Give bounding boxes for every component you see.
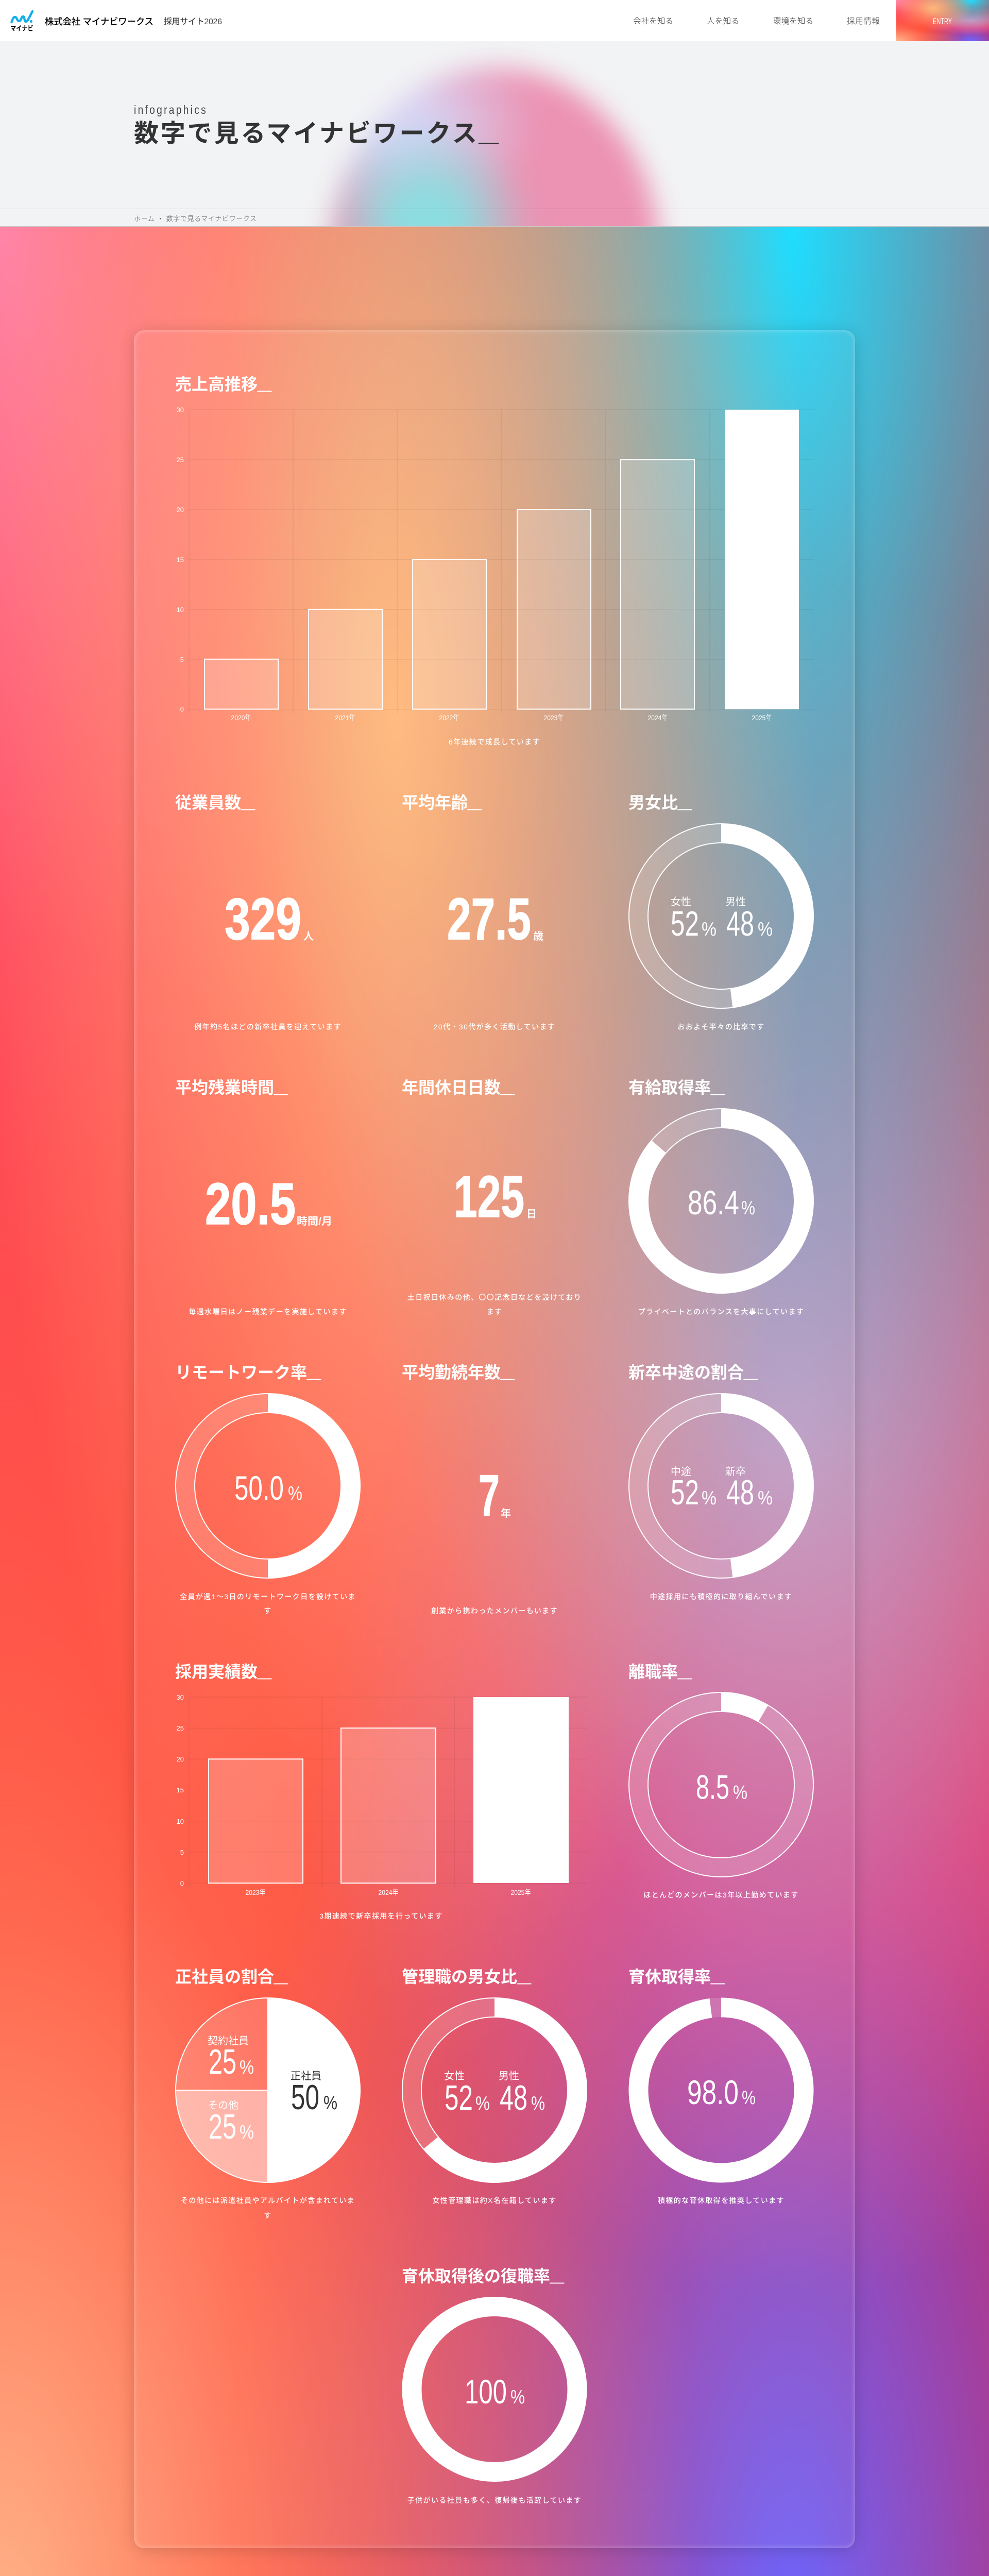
caption: プライベートとのバランスを大事にしています <box>638 1308 804 1316</box>
bar chart: sales: 2024年 <box>648 714 668 722</box>
heading: 平均残業時間__ <box>175 1078 288 1097</box>
bar chart: sales: 2023年 <box>544 714 564 722</box>
panel: employees <box>175 793 342 1031</box>
donut labels: 新卒 <box>725 1466 746 1478</box>
pie labels: % <box>240 2057 254 2078</box>
donut labels: 52 <box>671 1473 699 1512</box>
pie labels: その他 <box>208 2099 238 2111</box>
panel: overtime <box>175 1078 347 1316</box>
donut labels: 男性 <box>725 896 746 908</box>
bar chart: hires: 20 <box>177 1755 184 1763</box>
donut chart <box>402 1998 587 2182</box>
heading: 育休取得率__ <box>628 1968 725 1986</box>
donut labels: 女性 <box>671 896 691 908</box>
heading: 採用実績数__ <box>175 1663 271 1681</box>
panel: turnover <box>628 1663 813 1899</box>
bar chart: sales: 30 <box>177 406 184 414</box>
heading: 離職率__ <box>628 1663 692 1681</box>
stat: 7 <box>479 1463 500 1529</box>
heading: 平均年齢__ <box>402 793 482 812</box>
breadcrumb: ホーム ・ 数字で見るマイナビワークス <box>134 215 257 223</box>
donut labels: 48 <box>500 2078 527 2117</box>
stat: 日 <box>526 1209 537 1220</box>
donut value: % <box>742 2087 756 2109</box>
bar chart: sales: 2020年 <box>231 714 251 722</box>
heading: 有給取得率__ <box>628 1078 725 1097</box>
donut labels <box>671 896 773 943</box>
donut value: % <box>510 2386 525 2408</box>
donut value: 86.4 <box>688 1183 739 1222</box>
caption: ます <box>487 1308 502 1316</box>
donut labels: % <box>475 2093 490 2114</box>
heading: 男女比__ <box>628 793 692 812</box>
caption: 6年連続で成長しています <box>449 738 540 746</box>
donut value: 8.5 <box>696 1768 729 1806</box>
bar chart: hires: 0 <box>180 1879 184 1887</box>
panel: annual holidays <box>402 1078 582 1316</box>
heading: 従業員数__ <box>175 793 255 812</box>
bar chart: sales <box>177 406 814 722</box>
donut chart <box>412 2307 577 2472</box>
donut value: 100 <box>465 2372 507 2411</box>
panel: paid leave rate <box>628 1078 813 1316</box>
caption: 毎週水曜日はノー残業デーを実施しています <box>189 1308 347 1316</box>
bar chart: hires <box>177 1693 587 1896</box>
bar chart: hires: 2023年 <box>245 1888 266 1896</box>
bar chart: hires: 2024年 <box>378 1888 399 1896</box>
donut chart <box>629 1394 813 1578</box>
caption: す <box>264 1606 272 1615</box>
donut labels: 52 <box>445 2078 473 2117</box>
bar chart: sales: 2025年 <box>752 714 772 722</box>
stat: 27.5 <box>447 887 531 952</box>
hero title: 数字で見るマイナビワークス__ <box>134 120 499 147</box>
pie labels: 50 <box>291 2078 319 2117</box>
donut value: % <box>288 1483 302 1504</box>
heading: 新卒中途の割合__ <box>628 1363 758 1382</box>
donut labels: 中途 <box>671 1466 691 1478</box>
bar chart: sales: 0 <box>180 705 184 713</box>
stat: 20.5 <box>205 1172 296 1237</box>
panel: return rate <box>402 2267 582 2504</box>
entry button background <box>896 0 989 41</box>
donut value: % <box>741 1197 755 1219</box>
heading: 売上高推移__ <box>175 375 271 394</box>
bar chart: sales: 20 <box>177 506 184 514</box>
bar chart: hires: 30 <box>177 1693 184 1701</box>
panel: remote work <box>175 1363 360 1615</box>
donut labels: 52 <box>671 904 699 943</box>
panel: tenure <box>402 1363 558 1615</box>
donut chart <box>176 1394 360 1578</box>
caption: 土日祝日休みの他、〇〇記念日などを設けており <box>407 1293 582 1301</box>
donut labels: % <box>758 1487 773 1509</box>
heading: 平均勤続年数__ <box>402 1363 515 1382</box>
donut chart <box>629 1109 813 1293</box>
header logo <box>10 11 222 32</box>
heading: 育休取得後の復職率__ <box>402 2267 564 2285</box>
caption: 例年約5名ほどの新卒社員を迎えています <box>194 1023 342 1031</box>
caption: 3期連続で新卒採用を行っています <box>319 1912 443 1920</box>
pie labels: 正社員 <box>291 2070 321 2082</box>
donut labels: % <box>702 1487 717 1509</box>
panel: sales trend <box>175 375 814 746</box>
global navigation <box>633 16 880 26</box>
pie chart <box>176 1998 360 2182</box>
donut labels: 男性 <box>499 2070 519 2082</box>
panel: gender ratio <box>628 793 813 1031</box>
pie labels: % <box>323 2092 337 2114</box>
pie labels: % <box>240 2122 254 2143</box>
bar chart: sales: 25 <box>177 456 184 464</box>
donut labels: 48 <box>726 904 754 943</box>
bar chart: sales: 2022年 <box>439 714 459 722</box>
stat: 人 <box>303 931 314 942</box>
bar chart: hires: 10 <box>177 1818 184 1825</box>
hero eyebrow: infographics <box>134 103 208 116</box>
logo icon <box>11 11 32 23</box>
heading: リモートワーク率__ <box>175 1363 321 1382</box>
pie labels <box>208 2035 337 2146</box>
stat: 時間/月 <box>297 1215 332 1227</box>
hero heading <box>134 103 499 147</box>
pie labels: 25 <box>209 2042 236 2081</box>
pie labels: 契約社員 <box>208 2035 249 2047</box>
caption: 20代・30代が多く活動しています <box>434 1023 555 1031</box>
heading: 正社員の割合__ <box>175 1968 288 1986</box>
bar chart: sales: 5 <box>180 656 184 664</box>
donut labels: % <box>702 919 717 940</box>
donut chart <box>629 824 813 1008</box>
panel: average age <box>402 793 555 1031</box>
entry label: ENTRY <box>933 16 952 26</box>
caption: 女性管理職は約X名在籍しています <box>432 2196 557 2205</box>
panel: regular employees <box>175 1968 360 2219</box>
stat: 125 <box>454 1164 524 1230</box>
caption: その他には派遣社員やアルバイトが含まれていま <box>181 2196 355 2205</box>
panel: childcare leave rate <box>628 1968 804 2205</box>
site name: 採用サイト2026 <box>164 17 222 26</box>
donut chart <box>639 2007 804 2173</box>
stat: 329 <box>225 887 301 952</box>
global navigation: 人を知る <box>707 16 739 26</box>
donut chart <box>629 1692 813 1877</box>
donut labels: 女性 <box>444 2070 465 2082</box>
donut labels <box>671 1466 773 1512</box>
caption: 全員が週1〜3日のリモートワーク日を設けていま <box>180 1592 356 1601</box>
bar chart: hires: 25 <box>177 1724 184 1732</box>
bar chart: sales: 15 <box>177 556 184 564</box>
donut labels: % <box>531 2093 545 2114</box>
stat: 年 <box>501 1507 511 1519</box>
donut value: 98.0 <box>687 2073 739 2111</box>
page hero <box>0 41 989 227</box>
caption <box>407 1293 582 1316</box>
global navigation: 会社を知る <box>633 16 673 26</box>
bar chart: hires: 5 <box>180 1849 184 1856</box>
donut labels: 48 <box>726 1473 754 1512</box>
header bar <box>0 0 989 41</box>
global navigation: 環境を知る <box>773 16 813 26</box>
caption: す <box>264 2211 272 2219</box>
pie labels: 25 <box>209 2107 236 2146</box>
global navigation: 採用情報 <box>847 16 880 26</box>
panel: new graduates vs mid-career <box>628 1363 813 1601</box>
caption <box>180 1592 356 1615</box>
company name: 株式会社 マイナビワークス <box>45 16 154 27</box>
panel: managers gender ratio <box>402 1968 587 2205</box>
donut value: % <box>733 1782 747 1803</box>
donut labels <box>444 2070 545 2117</box>
bar chart: sales: 2021年 <box>335 714 355 722</box>
logo wordmark: マイナビ <box>10 25 33 32</box>
caption: 創業から携わったメンバーもいます <box>431 1606 558 1615</box>
panel: hiring results <box>175 1663 587 1920</box>
heading: 年間休日日数__ <box>402 1078 515 1097</box>
bar chart: sales: 10 <box>177 606 184 614</box>
glass panel <box>134 330 855 2548</box>
stat: 歳 <box>533 930 543 942</box>
hero gradient blob <box>330 68 659 439</box>
bar chart: hires: 15 <box>177 1786 184 1794</box>
caption: 積極的な育休取得を推奨しています <box>658 2196 785 2205</box>
caption: おおよそ半々の比率です <box>677 1023 765 1031</box>
caption: 中途採用にも積極的に取り組んでいます <box>650 1592 792 1601</box>
heading: 管理職の男女比__ <box>402 1968 531 1986</box>
donut value: 50.0 <box>234 1469 284 1507</box>
caption: ほとんどのメンバーは3年以上勤めています <box>643 1891 799 1899</box>
caption <box>181 2196 355 2219</box>
donut labels: % <box>758 919 773 940</box>
bar chart: hires: 2025年 <box>511 1888 531 1896</box>
caption: 子供がいる社員も多く、復帰後も活躍しています <box>407 2496 582 2504</box>
